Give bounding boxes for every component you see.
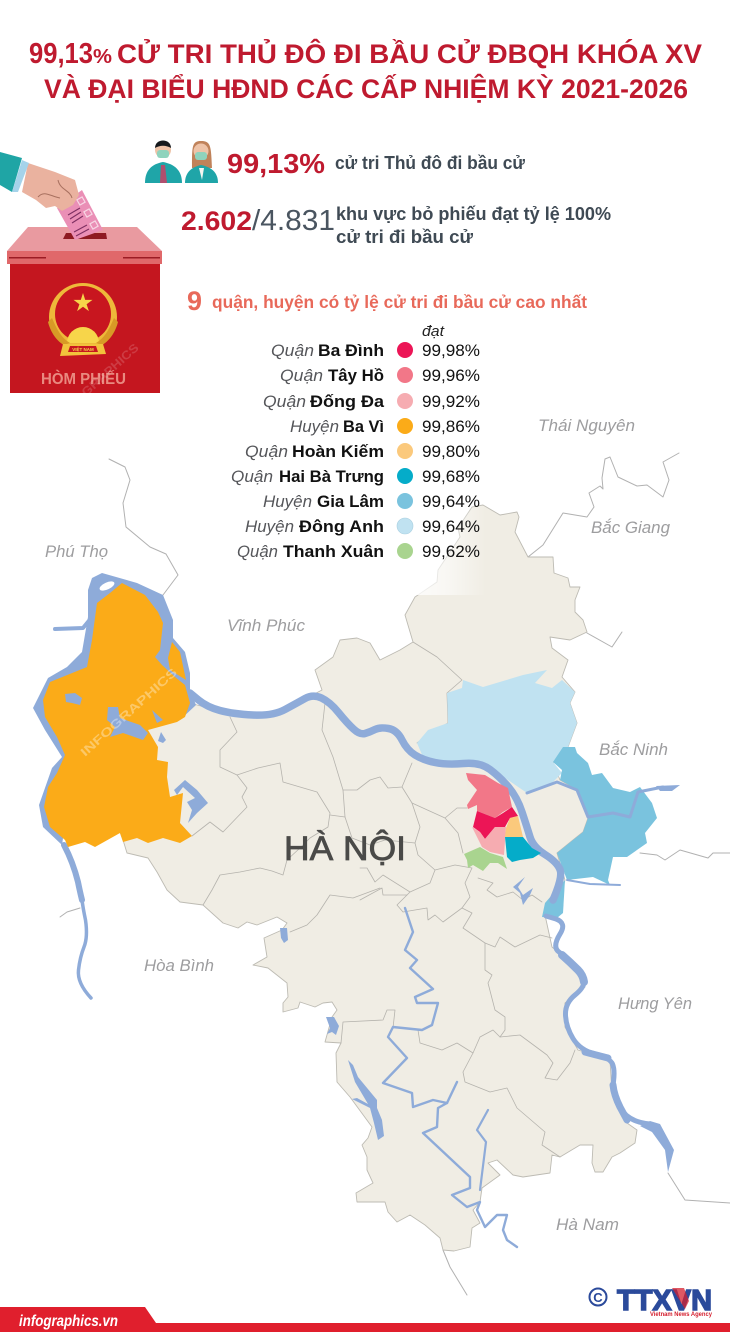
title bbox=[29, 37, 702, 104]
legend heading: quận, huyện có tỷ lệ cử tri đi bầu cử cao nhất bbox=[212, 292, 587, 312]
row: Gia Lam bbox=[263, 492, 480, 511]
row: Ba Vi bbox=[290, 417, 480, 436]
Ba Vi river bed bbox=[33, 573, 196, 845]
row: Ba Vi: 99,86% bbox=[422, 417, 480, 436]
stat: 99,13% voters bbox=[145, 140, 526, 183]
row: Ba Vi: Huyện bbox=[290, 417, 339, 436]
lid front bbox=[7, 251, 162, 264]
white fade behind legend bbox=[404, 498, 486, 595]
row: Hai Ba Trung: 99,68% bbox=[422, 467, 480, 486]
row: Thanh Xuan bbox=[237, 542, 480, 561]
row: Ba Dinh: Quận bbox=[271, 341, 314, 360]
Dong Anh district bbox=[417, 670, 577, 793]
row: Ba Dinh: 99,98% bbox=[422, 341, 480, 360]
Dong Da bbox=[472, 827, 506, 855]
row: Thanh Xuan: Thanh Xuân bbox=[283, 542, 384, 561]
sleeve and cuff bbox=[0, 152, 22, 192]
province labels: Hòa Bình bbox=[144, 956, 214, 975]
Ba Vi district bbox=[43, 579, 192, 847]
ballot paper bbox=[57, 190, 103, 240]
row: Hoan Kiem bbox=[245, 442, 480, 461]
emblem: VIỆT NAM bbox=[72, 345, 94, 352]
stat: 2.602/4.831 polling areas: cử tri đi bầu cử bbox=[336, 227, 474, 247]
province labels: Phú Thọ bbox=[45, 542, 108, 561]
stat: 99,13% voters: cử tri Thủ đô đi bầu cử bbox=[335, 153, 526, 173]
Hai Ba Trung bbox=[505, 837, 541, 862]
row: Gia Lam: Huyện bbox=[263, 492, 312, 511]
row: Dong Da: 99,92% bbox=[422, 392, 480, 411]
row: Hai Ba Trung: Hai Bà Trưng bbox=[279, 467, 384, 486]
row: Hoan Kiem: Hoàn Kiếm bbox=[292, 442, 384, 461]
row: Hoan Kiem: Quận bbox=[245, 442, 288, 461]
Ba Vi district: INFOGRAPHICS bbox=[78, 665, 180, 759]
row: Ba Dinh bbox=[271, 341, 480, 360]
title: CỬ TRI THỦ ĐÔ ĐI BẦU CỬ ĐBQH KHÓA XV bbox=[117, 37, 702, 69]
neighbouring province borders bbox=[60, 453, 730, 1295]
title: % bbox=[93, 46, 112, 68]
hand bbox=[22, 163, 79, 211]
map of Hanoi bbox=[33, 416, 730, 1295]
province labels: Thái Nguyên bbox=[538, 416, 635, 435]
Hanoi territory bbox=[100, 505, 637, 1251]
row: Dong Anh bbox=[245, 517, 480, 536]
province labels: Vĩnh Phúc bbox=[227, 616, 305, 635]
box front bbox=[10, 264, 160, 393]
row: Ba Vi: Ba Vì bbox=[343, 417, 384, 436]
TTXVN logo: Vietnam News Agency bbox=[650, 1311, 712, 1318]
row: Ba Dinh: Ba Đình bbox=[318, 341, 384, 360]
Thanh Xuan bbox=[464, 847, 507, 871]
Gia Lam district bbox=[542, 747, 657, 918]
row: Gia Lam: Gia Lâm bbox=[317, 492, 384, 511]
row: Hai Ba Trung: Quận bbox=[231, 467, 273, 486]
Tay Ho bbox=[466, 773, 512, 818]
TTXVN logo: C bbox=[593, 1290, 603, 1305]
legend heading bbox=[187, 286, 587, 316]
TTXVN logo: TTXVN bbox=[617, 1285, 712, 1317]
province labels: Bắc Giang bbox=[591, 518, 671, 537]
Ba Dinh bbox=[473, 807, 518, 839]
box lid top bbox=[7, 227, 162, 251]
province labels: Hà Nam bbox=[556, 1215, 619, 1234]
legend heading: 9 bbox=[187, 286, 202, 316]
row: Hoan Kiem: 99,80% bbox=[422, 442, 480, 461]
row: Thanh Xuan: Quận bbox=[237, 542, 278, 561]
southern rivers and lakes bbox=[158, 732, 533, 1247]
province labels: Bắc Ninh bbox=[599, 740, 668, 759]
icon: ballot box with hand: GRAPHICS bbox=[79, 341, 142, 399]
province labels bbox=[45, 416, 692, 1234]
row: Dong Da: Đống Đa bbox=[310, 392, 385, 411]
row: Gia Lam: 99,64% bbox=[422, 492, 480, 511]
stat: 99,13% voters: 99,13% bbox=[227, 148, 325, 179]
row: Tay Ho: 99,96% bbox=[422, 366, 480, 385]
Hoan Kiem bbox=[505, 816, 523, 837]
row: Dong Anh: Huyện bbox=[245, 517, 294, 536]
icon: ballot box with hand bbox=[0, 152, 162, 399]
stat: 2.602/4.831 polling areas: 2.602 bbox=[181, 206, 252, 236]
box label: HÒM PHIẾU bbox=[41, 370, 126, 388]
row: Dong Anh: 99,64% bbox=[422, 517, 480, 536]
row: Dong Da: Quận bbox=[263, 392, 306, 411]
row: Tay Ho bbox=[280, 366, 480, 385]
stat: 2.602/4.831 polling areas: khu vực bỏ phiếu đạt tỷ lệ 100% bbox=[336, 204, 611, 224]
district borders bbox=[192, 642, 575, 1157]
row: Hai Ba Trung bbox=[231, 467, 480, 486]
footer bar bbox=[0, 1307, 730, 1332]
row: Dong Da bbox=[263, 392, 480, 411]
province labels: Hưng Yên bbox=[618, 994, 692, 1013]
row: Thanh Xuan: 99,62% bbox=[422, 542, 480, 561]
legend list bbox=[231, 323, 480, 561]
emblem bbox=[48, 283, 118, 356]
row: Dong Anh: Đông Anh bbox=[299, 517, 384, 536]
ballot slot bbox=[63, 233, 107, 239]
legend list: đạt bbox=[422, 323, 445, 340]
footer bar: infographics.vn bbox=[19, 1313, 118, 1330]
Red River and branches bbox=[55, 617, 680, 1172]
title: VÀ ĐẠI BIỂU HĐND CÁC CẤP NHIỆM KỲ 2021-2026 bbox=[44, 73, 688, 104]
Ha Noi label: HÀ NỘI bbox=[284, 830, 406, 868]
row: Tay Ho: Tây Hồ bbox=[328, 366, 384, 385]
stat: 2.602/4.831 polling areas: /4.831 bbox=[252, 205, 335, 237]
icon: voters with masks bbox=[145, 140, 218, 183]
row: Tay Ho: Quận bbox=[280, 366, 323, 385]
title: 99,13 bbox=[29, 38, 93, 70]
inner city districts bbox=[464, 773, 541, 871]
stat: 2.602/4.831 polling areas bbox=[181, 204, 611, 247]
